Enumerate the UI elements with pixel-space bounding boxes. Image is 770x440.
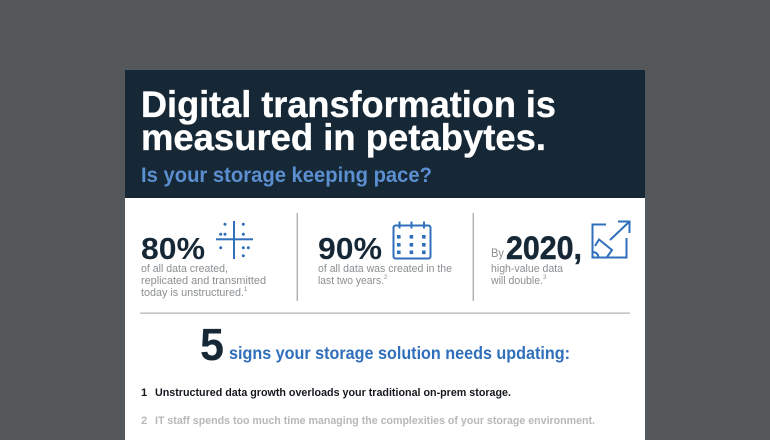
list item 2: IT staff spends too much time managing the complexities of your storage environment.	[155, 415, 595, 427]
list item 1: 1	[141, 387, 147, 399]
list item 1: Unstructured data growth overloads your traditional on-prem storage.	[155, 387, 511, 399]
divider	[473, 213, 474, 301]
stat description: unstructured data	[141, 263, 266, 299]
stat: 80 percent	[141, 231, 266, 299]
panel: white document	[125, 198, 645, 440]
stat description: high-value data: will double.	[490, 275, 543, 287]
subtitle: Is your storage keeping pace?	[141, 163, 432, 187]
heading: 5 signs: signs your storage solution needs updating:	[229, 343, 570, 363]
stat: 90 percent: 90%	[318, 231, 382, 266]
stat description: high-value data	[490, 263, 563, 287]
divider	[140, 313, 630, 314]
stat description: high-value data: high-value data	[491, 263, 563, 275]
list item 2: 2	[141, 415, 147, 427]
stat description: recent data: last two years.	[318, 275, 384, 287]
heading: 5 signs	[200, 319, 570, 370]
icon: calendar	[394, 222, 430, 258]
heading: 5 signs: 5	[200, 319, 224, 370]
stat description: high-value data: 3	[543, 275, 547, 281]
stat description: recent data	[318, 263, 452, 287]
title: Digital transformation is	[141, 83, 556, 125]
stat: by 2020: By	[491, 248, 504, 260]
stat: by 2020: 2020,	[506, 230, 582, 266]
panel: header banner	[125, 70, 645, 198]
stat: 80 percent: 80%	[141, 231, 205, 266]
stat description: recent data: of all data was created in the	[318, 263, 452, 275]
title	[141, 83, 556, 158]
stat: 90 percent	[318, 231, 452, 287]
title: measured in petabytes.	[141, 116, 546, 158]
icon: crosshair with dots	[216, 221, 253, 259]
divider	[297, 213, 298, 301]
icon: expand arrow	[592, 222, 630, 258]
stat description: unstructured data: 1	[244, 287, 248, 293]
stat: by 2020	[490, 230, 582, 287]
stat description: unstructured data: replicated and transmitted	[141, 275, 266, 287]
stat description: unstructured data: today is unstructured.	[141, 287, 244, 299]
stat description: unstructured data: of all data created,	[141, 263, 228, 275]
stat description: recent data: 2	[384, 275, 388, 281]
